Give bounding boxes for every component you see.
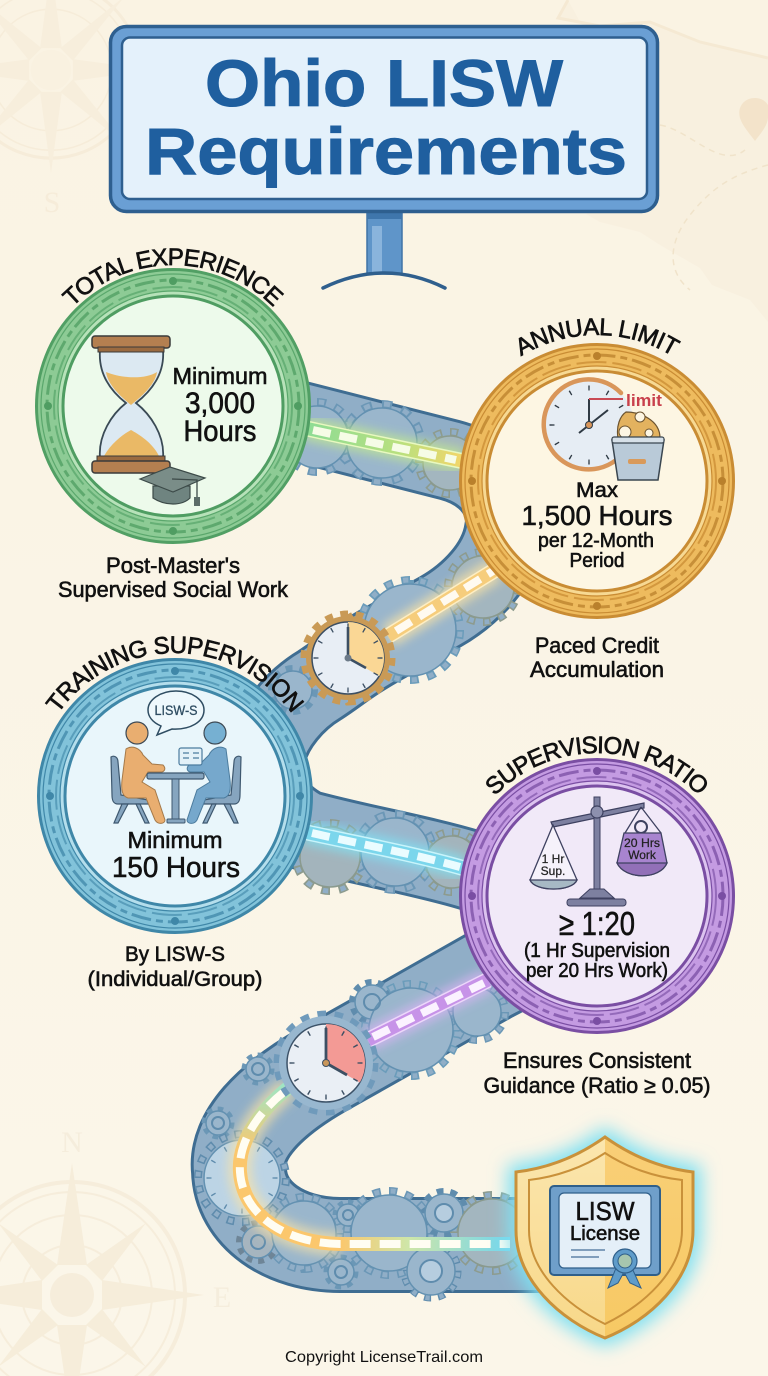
icon: two people at a table (111, 722, 241, 823)
icon: ribbon seal (608, 1249, 641, 1288)
copyright footer: Copyright LicenseTrail.com (285, 1349, 483, 1366)
icon: balance scale (530, 797, 667, 906)
light line: yellow (388, 570, 495, 636)
caption: training supervision: By LISW-S (125, 943, 225, 966)
heading: training supervision: TRAINING SUPERVISION (44, 636, 304, 713)
gears on road (198, 402, 530, 1298)
title: line 1: Ohio LISW (205, 46, 564, 120)
license certificate (550, 1186, 660, 1275)
title: line 2: Requirements (145, 114, 627, 188)
light line: purple (368, 980, 488, 1040)
compass rose: bottom left (0, 1163, 204, 1376)
caption: total experience: Post-Master's (106, 553, 240, 578)
stat: minimum 3,000 hours (172, 363, 268, 448)
light line: cyan (305, 832, 463, 868)
icon: graduation cap (140, 467, 205, 506)
stat: max 1,500 hours: Max (576, 479, 619, 502)
light line: green to yellow (305, 428, 462, 461)
icon: hourglass (92, 336, 170, 473)
label: 20 hrs: 20 Hrs (624, 836, 660, 850)
stat: minimum 3,000 hours: 3,000 (185, 387, 255, 420)
stat: max 1,500 hours: Period (570, 550, 624, 572)
license certificate: License (570, 1223, 640, 1245)
shield glow (516, 1137, 693, 1338)
sign board (110, 26, 658, 212)
caption: total experience: Supervised Social Work (58, 577, 289, 602)
clock gear: gold (304, 614, 392, 702)
caption: supervision ratio: Ensures Consistent (503, 1048, 691, 1073)
sign post (323, 210, 445, 288)
label: 1 hr sup.: 1 Hr (542, 852, 564, 866)
winding road: upper section (263, 418, 562, 950)
icon: speech bubble LISW-S: LISW-S (154, 703, 198, 718)
stat: minimum 150 hours: 150 Hours (112, 852, 240, 884)
panel: training supervision (37, 636, 313, 934)
stat: ratio 1:20: (1 Hr Supervision (524, 940, 670, 962)
stat: minimum 3,000 hours: Minimum (172, 363, 268, 389)
icon: bucket of credits (612, 412, 664, 480)
label: sup.: Sup. (541, 864, 565, 878)
label: work: Work (628, 848, 657, 862)
panel: annual limit (459, 318, 735, 619)
stat: max 1,500 hours: 1,500 Hours (522, 500, 672, 531)
icon: map pin (739, 98, 768, 141)
caption: annual limit: Paced Credit (535, 633, 659, 658)
stat: ratio 1:20: per 20 Hrs Work) (526, 960, 668, 982)
caption: supervision ratio (484, 1048, 710, 1098)
purple ornate ring (460, 760, 734, 1032)
caption: total experience (58, 553, 289, 602)
heading: annual limit: ANNUAL LIMIT (518, 318, 681, 357)
title sign (110, 26, 658, 288)
glowing path lines (240, 428, 510, 1244)
compass letter N: N (61, 1126, 83, 1159)
green ornate ring (36, 270, 310, 542)
stat: max 1,500 hours: per 12-Month (538, 530, 654, 552)
license certificate: LISW (576, 1196, 635, 1226)
compass rose: top left (0, 0, 154, 173)
heading: total experience: TOTAL EXPERIENCE (61, 248, 284, 307)
stat: minimum 3,000 hours: Hours (184, 415, 256, 448)
shield body (516, 1137, 693, 1338)
stat: ratio 1:20: ≥ 1:20 (559, 905, 635, 942)
caption: training supervision: (Individual/Group) (88, 968, 262, 991)
stat: ratio 1:20 (524, 905, 670, 982)
stat: max 1,500 hours (522, 479, 672, 572)
compass letter S: S (44, 186, 60, 219)
clock gear: silver with red wedge (277, 1014, 375, 1112)
faint map: top right (558, 0, 768, 322)
gold ornate ring (460, 344, 734, 618)
icon: speech bubble LISW-S (148, 691, 204, 735)
panel: supervision ratio (459, 736, 735, 1034)
icon: clock with limit (544, 379, 662, 470)
heading: supervision ratio: SUPERVISION RATIO (486, 736, 708, 794)
caption: annual limit: Accumulation (530, 657, 664, 682)
winding road: lower section (239, 915, 560, 1245)
light line: final stretch (240, 1088, 510, 1244)
stat: minimum 150 hours (112, 827, 240, 884)
stat: minimum 150 hours: Minimum (128, 827, 222, 853)
panel: total experience (35, 248, 311, 544)
license shield (516, 1137, 693, 1338)
compass letter E: E (213, 1281, 231, 1314)
caption: annual limit (530, 633, 664, 682)
blue ornate ring (38, 660, 312, 932)
caption: supervision ratio: Guidance (Ratio ≥ 0.05) (484, 1073, 710, 1098)
label: limit: limit (626, 391, 662, 410)
caption: training supervision (88, 943, 262, 991)
